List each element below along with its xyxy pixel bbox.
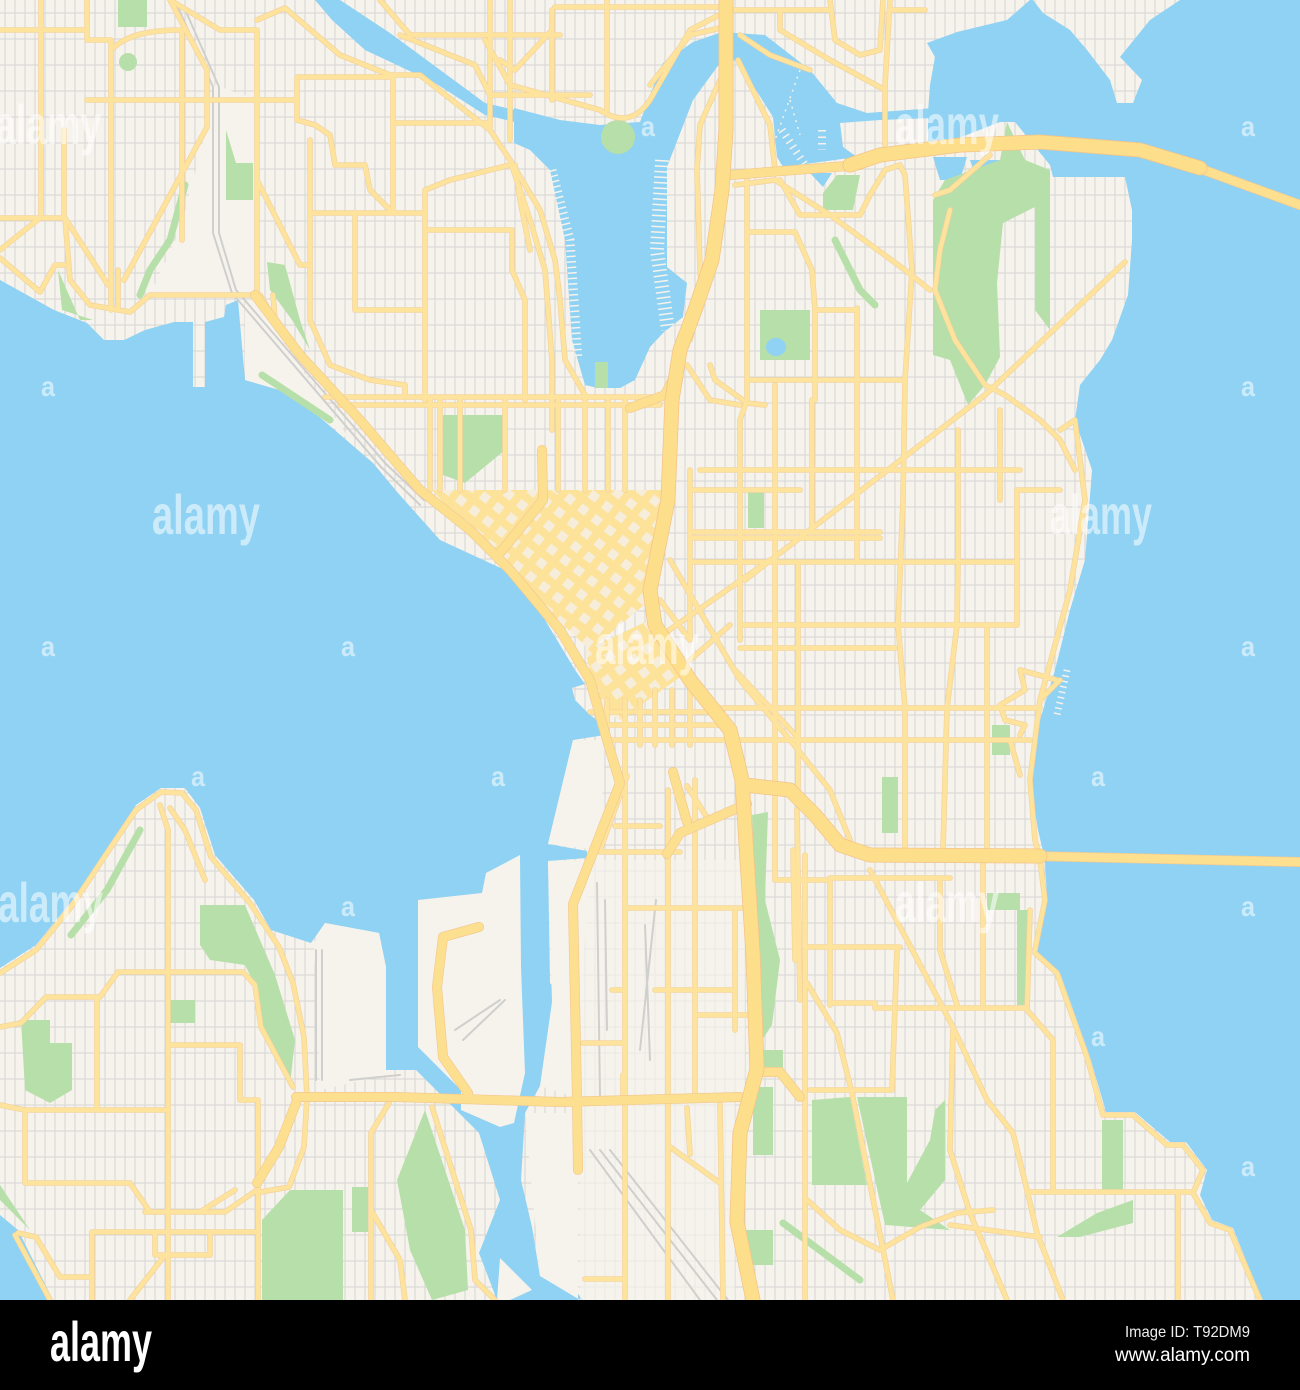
land: Harbor Island <box>418 855 525 1127</box>
narrow green belts <box>71 185 875 1280</box>
watermark logos: alamy <box>0 871 103 934</box>
watermark logos <box>0 93 1255 1182</box>
watermark logos: a <box>1091 761 1105 792</box>
watermark logos: a <box>41 631 55 662</box>
watermark logos: alamy <box>1050 483 1152 546</box>
footer logo: alamy <box>50 1310 152 1373</box>
watermark logos: a <box>1241 371 1255 402</box>
land: northeast peninsula <box>1033 0 1180 103</box>
highways: Interstate 5, Interstate 90 and State Route 520 <box>650 0 1200 1300</box>
watermark logos: a <box>491 761 505 792</box>
pioneer square street grid <box>585 620 690 720</box>
watermark logos: a <box>41 371 55 402</box>
watermark logos: a <box>641 111 655 142</box>
watermark logos: a <box>191 761 205 792</box>
blank industrial land and rail yards <box>150 85 745 1300</box>
watermark logos: alamy <box>895 93 999 156</box>
downtown street grid <box>432 490 665 650</box>
watermark logos: a <box>1241 111 1255 142</box>
footer bar <box>0 1300 1300 1390</box>
watermark logos: alamy <box>595 613 699 676</box>
watermark logos: a <box>341 891 355 922</box>
website: www.alamy.com <box>1114 1345 1250 1366</box>
water: ponds by Foster Island <box>810 157 1017 190</box>
watermark logos: a <box>1241 1151 1255 1182</box>
watermark logos: a <box>1241 891 1255 922</box>
watermark logos: a <box>1091 1021 1105 1052</box>
watermark logos: alamy <box>152 483 260 546</box>
rail corridors <box>178 7 728 1300</box>
water: Lake Union and Portage Bay <box>514 32 935 388</box>
watermark logos: a <box>1241 631 1255 662</box>
image id: Image ID: T92DM9 <box>1125 1324 1250 1341</box>
land: West Seattle <box>0 788 500 1300</box>
watermark logos: alamy <box>895 871 999 934</box>
highways: secondary routes and ramps <box>255 165 1300 1183</box>
pocket park at Lake Union <box>601 120 635 154</box>
water: ship canal <box>315 0 515 122</box>
pond in Volunteer Park <box>766 338 786 356</box>
watermark logos: a <box>341 631 355 662</box>
land: Harbor Island south tip <box>497 1258 532 1300</box>
marina piers <box>552 70 1067 715</box>
